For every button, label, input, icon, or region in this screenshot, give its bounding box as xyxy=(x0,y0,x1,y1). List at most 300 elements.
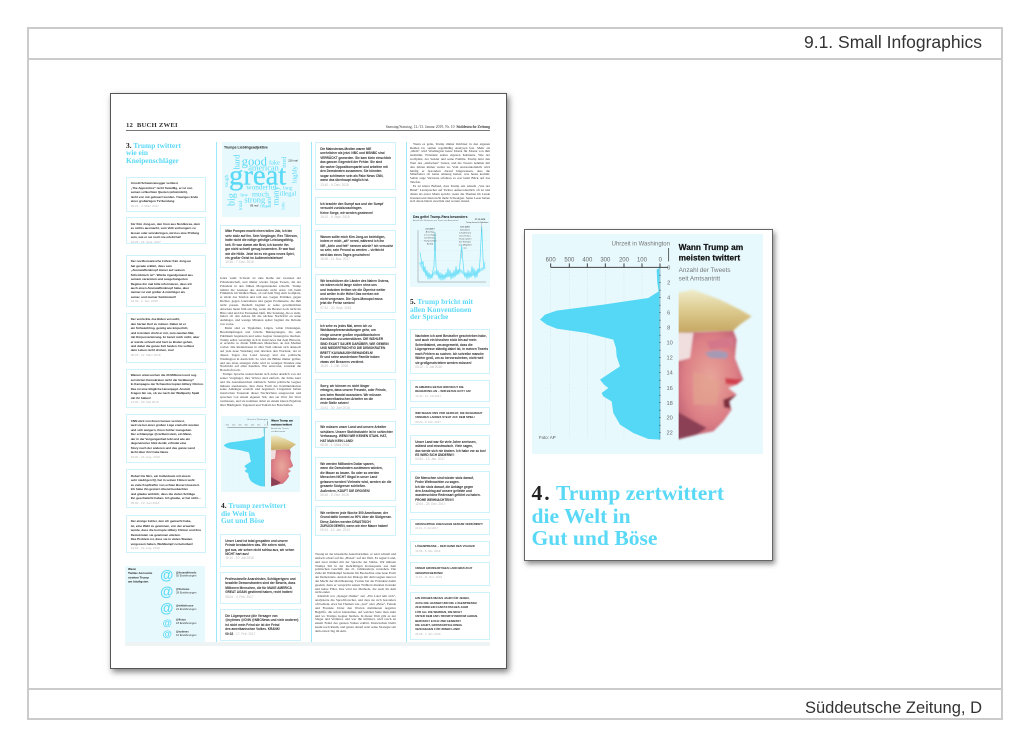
y axis: 2 xyxy=(667,281,670,287)
tweet box: Ich bin stolz darauf, die Anklage gegen xyxy=(415,484,473,488)
tweet box: Robert De Niro, ein Individuum mit einem xyxy=(131,474,190,478)
tweet box xyxy=(410,519,490,535)
tweet box: Wir müssen unser Land und unsere Arbeiter xyxy=(320,425,386,429)
chart annotations: Trump spricht xyxy=(459,237,472,240)
tweet box: uns beim Handel ausnutzen. Wir müssen xyxy=(320,392,381,396)
tweet box: schützen. Unsere Stahlindustrie ist in schlechter xyxy=(320,430,393,434)
account list xyxy=(176,570,197,637)
tweet box xyxy=(410,471,490,513)
tweet box: Ich sehe es jedes Mal, wenn ich zu xyxy=(320,324,372,328)
tweet box xyxy=(410,329,490,374)
tweet box: mit Körperverletzung. Er kennt mich nicht, aber xyxy=(131,335,199,339)
tweet box: Arnold Schwarzenegger verlässt xyxy=(131,181,178,185)
tweet box: 03:12 - 3. Juli 2018 xyxy=(415,365,442,369)
tweet box: 09:24 - 10. Jan. 2019 xyxy=(320,528,350,532)
tweet box: Story nach der anderen und das ganze Land xyxy=(131,446,195,450)
chart title xyxy=(413,214,468,222)
tweet box: Der nordkoreanische Führer Kim Jong-un xyxy=(131,259,191,263)
tweet box: wunderschöne Redensart geführt zu haben. xyxy=(415,493,481,497)
chart annotations: in Las Vegas xyxy=(424,234,436,236)
tweet box: Außerdem, KÄUFT DIE DROGEN! xyxy=(320,489,370,493)
tweet box: Demokraten sie gewinnen würden. xyxy=(131,533,181,537)
tweet box: Er und seine wunderbare Familie haben xyxy=(320,355,380,359)
tweet box: seiner, und meiner funktioniert! xyxy=(131,295,176,299)
tweet box: 18:48 - 11. Nov. 2017 xyxy=(320,257,350,261)
heading: section 4: 4. Trump zertwittert xyxy=(221,501,286,510)
tweet box: EIN FROHES NEUES JAHR FÜR JEDEN, xyxy=(415,596,469,600)
chart title: Wann Trump am xyxy=(679,242,743,252)
tweet box xyxy=(315,197,396,225)
tweet box: UNSER GROSSARTIGES LAND BRAUCHT xyxy=(415,566,472,570)
tweet box xyxy=(410,380,490,402)
tweet box: und auch ein bisschen stolz bin auf mein xyxy=(415,338,476,342)
tweet box: Warum sollte mich Kim Jong-un beleidigen, xyxy=(320,235,385,239)
tweet box xyxy=(126,515,206,553)
chart annotations: mit 12 Toten, xyxy=(459,234,471,237)
tweet box: 19:12 - 9. Sept. 2018 xyxy=(320,215,350,219)
heading: section 4 xyxy=(221,501,286,525)
tweet box: Die Mainstream-Medien waren NIE xyxy=(320,147,371,151)
chart annotations: Beileid xyxy=(427,243,434,245)
chart annotations: aus xyxy=(463,247,467,249)
line xyxy=(420,226,485,280)
tweet box: vergessen haben, Wahlkampf zu betreiben! xyxy=(131,542,193,546)
tweet box: 00:32 - 17. Feb. 2017 xyxy=(225,632,255,636)
article text xyxy=(220,277,301,407)
tweet box: zu viele Kopftreffer von echten Boxern kassiert. xyxy=(131,483,200,487)
tweet box: GRENZSICHERUNG! xyxy=(415,571,443,575)
word cloud words: many xyxy=(270,185,280,205)
chart annotations: 27.12.2018 xyxy=(475,218,486,220)
word cloud words: good xyxy=(241,154,267,168)
article text: Kürzlich trat „Spiegel Online“ auf, „Ein Land teilt sich“, analysierte die Sprachforscher, und dass sie sich besonders oft bedient, etwa bei Themen wie „Gut“ oder „Böse“, Feinde und Freunde. Unter den Worten dominieren negative Begriffe, die sofort klarstellen, auf welcher Seite man steht und wo Trumps Gegner bleiben. In dieser Welt gibt es nur Sieger und Verlierer, und wer ihn kritisiert, wird rasch zu einem Feind des ganzen Volkes erklärt. Dazwischen bleibt kaum noch Raum, und genau darauf setzt seine Strategie seit dem ersten Tag im Amt. xyxy=(315,594,396,633)
chart title: Anzahl der Retweets pro Tweet seit Amtsantritt xyxy=(413,219,459,222)
article text: Meist sind es Tippfehler, Lügen, wilde Drohungen, Beschimpfungen und falsche Behauptungen, die sein Publikum begeistern und seine Gegner fassungslos machen. Trump selbst verteidigt sich in Interviews mit dem Hinweis, er erreiche so direkt Millionen Menschen, an den Medien vorbei. Die Redaktionen in aller Welt stürzen sich dennoch auf jede neue Wendung und drucken den Wortlaut, der in diesen Tagen das Land bewegt und das politische Washington in Atem hält. So wird die Bühne immer größer, und aus einer einzigen Zeile wird in wenigen Stunden eine Nachricht auf allen Kanälen. Wer antwortet, verstärkt die Botschaft noch. xyxy=(220,326,301,372)
tweet box: den amerikanischen Arbeiter an die xyxy=(320,397,373,401)
newspaper header xyxy=(126,120,490,130)
chart annotations: 2.10.2017 xyxy=(425,228,435,230)
chart: tweets small copy: 100 xyxy=(257,425,261,427)
tweet box: und trotzdem droht er mir, zum zweiten Mal, xyxy=(131,331,194,335)
y axis: 20 xyxy=(666,415,673,421)
caption: source: Süddeutsche Zeitung, D xyxy=(805,699,982,717)
account list: @whitehouse xyxy=(176,604,194,608)
chart annotations: sein Mitgefühl xyxy=(459,243,472,246)
tweet box: 05:00 - 13. Juni 2018 xyxy=(131,501,159,505)
chart annotations: Trump twittert xyxy=(424,239,437,242)
tweet box: Der einzige Fehler, den ich gemacht habe, xyxy=(131,519,191,523)
tweet box: REGIERUNG AN – WIR BETEN GOTT AN! xyxy=(415,389,471,393)
article text xyxy=(410,143,490,202)
tweet box: Menschen NICHT illegal in unser Land xyxy=(320,475,377,479)
tweet box: versucht zurückzuschlagen. xyxy=(320,206,362,210)
tweet box: Die Menschen sind wieder stolz darauf, xyxy=(415,476,474,480)
tweet box: 06:08 - 1. Jan. 2019 xyxy=(415,632,440,636)
tweet box: sie wären nicht lange sicher ohne uns xyxy=(320,283,377,287)
tweet box: 14:02 - 22. Aug. 2018 xyxy=(131,546,160,550)
tweet box: Die Lügenpresse (die Versager von xyxy=(225,614,278,618)
word cloud words: hard xyxy=(232,153,241,169)
tweet box: 2019 WIRD EIN FANTASTISCHES JAHR xyxy=(415,605,468,609)
tweet box xyxy=(315,230,396,268)
newspaper header: Samstag/Sonntag, 12./13. Januar 2019, Nr. 10 Süddeutsche Zeitung xyxy=(386,124,490,128)
x axis: 200 xyxy=(619,257,630,263)
chart: tweets small copy: meisten twittert xyxy=(271,422,292,426)
tweet box: Ich habe ihn gestern Abend beobachtet xyxy=(131,487,188,491)
y axis xyxy=(660,265,673,440)
tweet box: UNSERES LANDES STEHT AUF DEM SPIEL! xyxy=(415,415,475,419)
tweet box: @nytimes @CNN @NBCNews und viele anderen) xyxy=(225,618,298,622)
tweet box xyxy=(126,313,206,363)
heading: section 4 large: die Welt in xyxy=(532,504,631,528)
icon: at signs: @ xyxy=(160,568,173,582)
chart: Wann Trump am meisten twittert xyxy=(532,234,763,454)
heading: section 5: der Sprache xyxy=(410,312,448,321)
tweet box: 07:32 - 20. Sept. 2018 xyxy=(320,306,351,310)
tweet box: zerstörten Demokraten nicht die Veräbung? xyxy=(131,378,194,382)
tweet box: und sich weigern, ihren Fehler zuzugeben. xyxy=(131,428,192,432)
chart: tweets small copy: Uhrzeit in Washington xyxy=(247,418,269,421)
word cloud words: 85 mal xyxy=(250,203,258,207)
tweet box: BERUHIGT EUCH UND GENIESST xyxy=(415,619,461,623)
tweet box: sogar schlimmer sein als Fake News CNN, xyxy=(320,174,383,178)
tweet box: lassen oder umzubringen, wird es eine Prüfung xyxy=(131,231,199,235)
word cloud words: strong xyxy=(244,195,265,204)
word cloud words: 216 mal xyxy=(288,158,298,162)
tweet box: wird das eines Tages geschehen! xyxy=(320,253,370,257)
tweet box: gar nicht schnell genug loswerden. Er war faul xyxy=(225,247,295,251)
tweet box: 00:20 - 9. Feb. 2017 xyxy=(415,420,441,424)
tweet box xyxy=(220,225,301,268)
tweet box: Regime ihn mal bitte informieren, dass ich xyxy=(131,282,192,286)
tweet box: Verfassung. WENN WIR KEINEN STAHL HAT, xyxy=(320,434,387,438)
silhouette area xyxy=(540,268,660,440)
word cloud words: low xyxy=(240,193,248,198)
word cloud words: fake xyxy=(269,159,280,166)
tweet box: Fragen bin sie, ob sie nach der Wahlparty Spaß xyxy=(131,391,199,395)
tweet box: 13:41 - 30. Juni 2018 xyxy=(320,406,350,410)
tweet box: Der verrückte Joe Biden versucht, xyxy=(131,317,180,321)
tweet box: das ganzen Gegenteil der Fehler. Sie sind xyxy=(320,160,382,164)
panel: enlarged detail page xyxy=(524,229,773,561)
y axis: 22 xyxy=(666,430,673,436)
tweet box: den Demokraten zusammen. Sie könnten xyxy=(320,169,381,173)
tweet box xyxy=(126,255,206,307)
icon: at signs xyxy=(160,568,173,640)
tweet box: Professionelle Anarchisten, Schlägertypen und xyxy=(225,577,296,581)
chart title: Das gefiel Trump-Fans besonders xyxy=(413,214,468,218)
tweet box: Nachdem ich zwei Bestseller geschrieben habe, xyxy=(415,334,487,338)
tweet box: wenn die Demokraten zustimmen würden, xyxy=(320,466,383,470)
tweet box: gut aus, wir sehen nicht schlau aus, wir sehen xyxy=(225,548,294,552)
tweet box xyxy=(315,421,396,448)
word cloud words: hard xyxy=(267,197,273,207)
heading: section 3: wie ein xyxy=(126,148,148,157)
tweet box: indem er mich „alt“ nennt, während ich ihn xyxy=(320,239,384,243)
tweet box: ist, eine Wahl zu gewinnen, von der erwartet xyxy=(131,524,195,528)
tweet box: Frohe Weihnachten zu sagen. xyxy=(415,480,459,484)
tweet box: Schreibtalent, um angemerkt, dass die xyxy=(415,343,473,347)
heading: section 4 large: Trump zertwittert xyxy=(556,481,724,505)
account list: 18 Erwähnungen xyxy=(176,621,197,625)
tweet box: und trotzdem treiben sie die Ölpreise weiter xyxy=(320,288,385,292)
panel: twitter accounts xyxy=(125,566,205,642)
tweet box xyxy=(410,562,490,586)
y axis: 8 xyxy=(667,326,670,332)
tweet box: UNTER DEM ANTI-TRUMP-SYNDROM LEIDEN. xyxy=(415,614,478,618)
tweet box: Der schlampige @carlbernstein, ein Mann, xyxy=(131,432,192,436)
panel title: streiten Trump xyxy=(128,575,149,579)
tweet box: gesamte Südgrenze schließen. xyxy=(320,484,366,488)
panel: word cloud xyxy=(222,142,300,217)
tweet box: des amerikanischen Volkes. KRANK! xyxy=(225,627,280,631)
tweet box: BRETT KAVANAUGH BEHANDELN! xyxy=(320,351,373,355)
tweet box: einige unserer großen republikanischen xyxy=(320,333,380,337)
word cloud words: wonderful xyxy=(246,182,276,191)
y axis: 10 xyxy=(666,341,673,347)
tweet box: SIND EXAKT SAUER DARÜBER, WIE GEMEIN xyxy=(320,342,389,346)
tweet box xyxy=(126,177,206,212)
tweet box: Wir beschützen die Länder des Nahen Ostens, xyxy=(320,279,389,283)
tweet box: mit ihr hatten! xyxy=(131,396,151,400)
tweet box: einer großartigen TV-Sendung xyxy=(131,199,174,203)
tweet box: ein großer Geist im Außenministerium! xyxy=(225,256,283,260)
account list: 55 Erwähnungen xyxy=(176,574,197,578)
tweet box: Das ist eine klägliche Hexenjagd. Anstatt xyxy=(131,387,190,391)
tweet box: 04:00 - 24. Aug. 2018 xyxy=(131,455,160,459)
tweet box: den Anschlag auf unsere geliebte und xyxy=(415,489,472,493)
tweet box: FROHE WEIHNACHTEN!!! xyxy=(415,498,454,502)
icon: at signs: @ xyxy=(163,629,172,640)
tweet box: Wir werden Milliarden Dollar sparen, xyxy=(320,462,374,466)
tweet box: IN AMERIKA BETEN WIR NICHT DIE xyxy=(415,385,464,389)
word cloud words: total xyxy=(238,200,244,210)
tweet box: unehrlicher als jetzt. NBC und MSNBC sind xyxy=(320,151,385,155)
tweet box: 04:54 - 13. Jan. 2017 xyxy=(415,457,445,461)
tweet box: und glaube wirklich, dass die vielen Schläge xyxy=(131,492,195,496)
tweet box: Lügenpresse ständig dabei ist, in meinen Tweets xyxy=(415,347,488,351)
tweet box: wurde, dass die korrupte Hillary Clinton und ihre xyxy=(131,528,201,532)
word cloud words: true xyxy=(260,204,267,209)
chart subtitle: seit Amtsantritt xyxy=(679,276,720,283)
tweet box: hatte nicht die nötige geistige Leistungsfähig- xyxy=(225,238,294,242)
tweet box: Für Kim Jong-un, den Irren aus Nordkorea, dem xyxy=(131,222,200,226)
tweet box: die Mauer zu bauen. So oder so werden xyxy=(320,471,379,475)
account list: 24 Erwähnungen xyxy=(176,607,197,611)
chart annotations: Trump besucht Soldaten xyxy=(466,220,489,223)
tweet box: NICHT hart aus! xyxy=(225,552,249,556)
heading: section 4: die Welt in xyxy=(221,509,255,518)
grid lines xyxy=(551,267,642,438)
tweet box: auch einen Atomwaffenknopf habe, aber xyxy=(131,286,189,290)
account list: @foxnews xyxy=(176,587,190,591)
chart annotations: 8.11.2018 xyxy=(460,226,470,228)
tweet box: den harten Kerl zu mimen. Dabei ist er xyxy=(131,322,186,326)
tweet box xyxy=(126,469,206,508)
x axis xyxy=(546,242,670,267)
tweet box: sie großgeschrieben werden müssen! xyxy=(415,361,472,365)
tweet box: der in der Vergangenheit lebt und wie ein xyxy=(131,437,190,441)
tweet box: GREAT AGAIN gestimmt haben, recht hatten! xyxy=(225,590,293,594)
bottom band xyxy=(125,642,490,646)
article text: Wenn es gelte, Trump immer Kürbiser in den eigenen Reihen ist, stellen regelmäßig Analysen fest. Mehr als „Mein“ wird Washington heute Monat für Monat von ihm bestimmt, Präsident seines eigenen Kabinetts. Wie der Golfplatz, der Sender und seine Familie. Trump lernt den Wert des „einfachen“ Satzes, und die Tweets nehmen mit den Jahren immer weiter zu. Vom Autorenkollektiv wird häufig er besonders darauf hingewiesen, dass die Mitarbeiter oft keine Ahnung hatten, was heute kommt. Selbst enge Vertraute erfahren es erst beim Blick auf das Telefon. xyxy=(410,143,490,184)
tweet box: ES WIRD SICH ÄNDERN!!! xyxy=(415,453,454,457)
tweet box: ihn geschwächt haben. Ich glaube, er hat nicht... xyxy=(131,496,201,500)
tweet box: Wahlkampfveranstaltungen gehe, um xyxy=(320,328,376,332)
tweet box: WIR SEHEN UNS VOR GERICHT, DIE SICHERHEIT xyxy=(415,411,483,415)
tweet box: Sorry, wir können es nicht länger xyxy=(320,384,370,388)
word cloud words: great xyxy=(229,159,286,191)
tweet box: keit. Er war dumm wie Brot, ich konnte ihn xyxy=(225,243,289,247)
tweet box: ein Schwächling, geistig wie körperlich, xyxy=(131,326,188,330)
tweet box xyxy=(126,217,206,244)
chart: tweets small copy: 300 xyxy=(244,425,249,427)
word cloud words xyxy=(224,153,298,210)
tweet box: Schreibtisch ist“. Würde irgendjemand aus xyxy=(131,273,193,277)
tweet box: 12:04 - 25. Dez. 2017 xyxy=(415,502,445,506)
chart annotations: mit 58 Toten, xyxy=(424,236,436,239)
tweet box: „The Apprentice“ nicht freiwillig, er ist von xyxy=(131,186,192,190)
tweet box: das werde sich nie ändern. Ich habe vor zu tun! xyxy=(415,448,486,452)
tweet box: erste Stelle setzen! xyxy=(320,401,349,405)
tweet box: seinem verarmten und ausgehungerten xyxy=(131,277,188,281)
heading: section title: 9.1. Small Infographics xyxy=(804,32,982,52)
y axis: 18 xyxy=(666,401,673,407)
heading: section 4: Gut und Böse xyxy=(221,516,264,525)
tweet box: Wörter groß, um zu hervorzuheben, nicht weil xyxy=(415,356,483,360)
chart: tweets small copy: 500 xyxy=(232,425,236,427)
chart title xyxy=(679,242,743,263)
icon: at signs: @ xyxy=(160,600,173,616)
tweet box: sehr niedrigen IQ, hat in seinen Filmen wohl xyxy=(131,478,195,482)
y axis: 6 xyxy=(667,311,670,317)
word cloud words: much xyxy=(252,189,269,198)
word cloud words: long xyxy=(283,185,292,191)
chart: tweets small copy: 200 xyxy=(251,425,255,427)
word cloud words: american xyxy=(248,163,279,172)
chart subtitle xyxy=(679,267,731,283)
tweet box: HAT MAN KEIN LAND! xyxy=(320,439,353,443)
tweet box xyxy=(126,369,206,408)
article text: Jedes weiß: Schwab ist eine Reihe der Grenzen der Präsidentschaft, und immer wieder folgen Tweets, die der Präsident in den frühen Morgenstunden schreibt. Trump nimmt die Grenzen des Anstands nicht ernst. Ob beim Frühstück im Weißen Haus, ob auf dem Weg zum Golfplatz, er zückt das Telefon und teilt aus. Gegen Politiker, gegen Richter, gegen Journalisten und gegen Prominente, die ihm nicht passen. Deshalb beginnt er seine gewöhnlichen Attacken meist früh am Tag, wenn die Berater noch nicht im Büro sind und das Fernsehen läuft. Die Sendung, die er sieht, liefert oft den Anlass für die nächste Nachricht an seine Anhänger, und wenige Minuten später beginnt die Debatte von vorne. xyxy=(220,277,301,326)
word cloud words: highly xyxy=(291,165,298,183)
heading: section 5: allen Konventionen xyxy=(410,305,471,314)
tweet box: jetzt die Preise senken! xyxy=(320,301,355,305)
heading: section 4 large xyxy=(532,481,724,550)
tweet box xyxy=(220,572,301,604)
tweet box: hat gerade erklärt, dass sein xyxy=(131,264,172,268)
tweet box: degenerierter Idiot denkt, erfindet eine xyxy=(131,441,186,445)
heading: section 4 large: 4. xyxy=(532,481,552,505)
account list: @flotus xyxy=(176,618,186,622)
tweet box: sehr stolz auf ihn. Sein Vorgänger, Rex Tillerson, xyxy=(225,234,298,238)
tweet box: Das Problem ist, dass sie in vielen Staaten xyxy=(131,537,192,541)
y axis: 14 xyxy=(666,371,673,377)
tweet box xyxy=(315,457,396,501)
tweet box: FÜR ALL DIE WERDEN, DIE NICHT xyxy=(415,610,462,614)
tweet box xyxy=(410,541,490,556)
tweet box: wie die Hölle. Jetzt ist es ein ganz neues Spiel, xyxy=(225,252,295,256)
tweet box: 08:28 - 22. März 2018 xyxy=(131,353,160,357)
account list: 16 Erwähnungen xyxy=(176,633,197,637)
tweet box xyxy=(315,506,396,536)
tweet box: „Atomwaffenknopf immer auf seinem xyxy=(131,268,185,272)
chart annotations: Anschlag xyxy=(426,230,435,233)
heading: section 3: Kneipenschläger xyxy=(126,156,179,165)
icon: at signs: @ xyxy=(160,584,173,599)
tweet box xyxy=(315,319,396,373)
tweet box xyxy=(315,379,396,410)
tweet box: Kandidaten zu unterstützen. DIE WÄHLER xyxy=(320,337,383,341)
tweet box: wütend und misstrauisch. Viele sagen, xyxy=(415,444,473,448)
tweet box: und dabei die ganze Zeit heulen. Du solltest xyxy=(131,344,194,348)
tweet box: gelassen werden! Vielmehr wird, werden sie die xyxy=(320,480,391,484)
account list: 28 Erwähnungen xyxy=(176,590,197,594)
tweet box: 13:06 - 6. Okt. 2018 xyxy=(415,549,440,553)
tweet box: 09:24 - 4. März 2017 xyxy=(131,204,159,208)
tweet box: Feinde beobachten das. Wir sehen nicht, xyxy=(225,543,286,547)
chart annotations xyxy=(424,218,489,249)
tweet box: ist nicht mein Feind sie ist der Feind xyxy=(225,623,279,627)
tweet box: lacht über ihn! Fake News xyxy=(131,450,168,454)
tweet box: 13:30 - 14. Juli 2017 xyxy=(415,394,441,398)
tweet box xyxy=(410,407,490,425)
y axis: 12 xyxy=(666,355,673,361)
x axis: Uhrzeit in Washington xyxy=(612,242,670,248)
article text xyxy=(315,553,396,633)
tweet box: Ich brachte den Sumpf aus und der Sumpf xyxy=(320,202,383,206)
tweet box: sein, wie er sie noch nie erlebt hat! xyxy=(131,235,181,239)
tweet box xyxy=(315,142,396,190)
chart: tweets small copy: seit Amtsantritt xyxy=(271,430,286,433)
photo credit: Foto: AP xyxy=(539,435,556,440)
panel title: Twitter-Accounts xyxy=(128,571,153,575)
panel title: Wenn xyxy=(128,567,136,571)
tweet box: Millionen Menschen, die für MAKE AMERICA xyxy=(225,586,292,590)
tweet box: die wahre Oppositionspartei und arbeiten mit xyxy=(320,165,388,169)
tweet box: LÜGENPRESSE – DER FEIND DES VOLKES! xyxy=(415,544,475,548)
tweet box: er würde schnell und hart zu Boden gehen, xyxy=(131,340,193,344)
tweet box: 13:04 - 30. Mai 2018 xyxy=(131,400,159,404)
tweet box: 04:28 - 22. Sept. 2017 xyxy=(131,240,161,244)
tweet box: weil sie bei einer großen Lüge erwischt worden xyxy=(131,423,199,427)
chart: tweets small copy: 0 xyxy=(264,425,266,427)
chart: tweets small copy xyxy=(221,416,300,492)
article text: Twung ist der klassische Autoritarismus, er setzt schnell und einfach scharf auf die „Bösen“ auf der Welt. Es regiert Land, und zwar immer mit der Sprache der Stärke. Wir müssen Trumps Stil in der mehrfältigen Konsequenz aus dem politischen Geschäft des 21. Jahrhunderts verstehen. Die Zeile im Wahlkampf bedeutet für Beobachter eine neue Form der Demokratie. Anstatt des Dialogs mit dem Gegner nutzt er die Macht der Mobilisierung. Twitter hat der Präsident damit geadelt, denn er verspricht seinen Wählern direkten Kontakt und keine Filter. Das wird zur Methode, die auch im Amt nicht endet. xyxy=(315,553,396,594)
tweet box: dein Leben nicht drohen, Joe! xyxy=(131,348,174,352)
article text: Trumps Sprache unterscheidet sich dabei deutlich von der seiner Vorgänger, ihre Wörter sind einfach, die Sätze kurz und die Ausrufezeichen zahlreich. Selbst politische Gegner müssen anerkennen, dass diese Form der Kommunikation seine Anhänger erreicht und begeistert. Linguisten haben inzwischen Tausende dieser Nachrichten ausgewertet und sprechen von einem eigenen Stil, den sie Wort für Wort vermessen, und sie kommen dabei zu einem klaren Ergebnis über Häufigkeit, Tageszeit und Tonfall der Botschaften. xyxy=(220,372,301,407)
tweet box: Grund dafür kommt zu 90% über die Südgrenze. xyxy=(320,515,392,519)
tweet box: In Kampagne der Schwerkorrupten Hillary Clinton. xyxy=(131,382,204,386)
tweet box: es nichts ausmacht, sein Volk verhungern zu xyxy=(131,226,196,230)
tweet box: 04:34 - 6. Juli 2017 xyxy=(415,527,438,530)
tweet box: etwas viel Besseres verdient. xyxy=(320,360,364,364)
tweet box: bezahlte Demonstranten sind der Beweis, dass xyxy=(225,581,295,585)
word cloud words: little xyxy=(280,201,285,209)
heading: section 3 xyxy=(126,140,181,165)
tweet box: 16:25 - 1. Okt. 2018 xyxy=(320,364,348,368)
y axis: 4 xyxy=(667,296,670,302)
tweet box xyxy=(126,414,206,463)
chart title: meisten twittert xyxy=(679,253,740,263)
tweet box: so sehr, sein Freund zu werden – vielleicht xyxy=(320,248,384,252)
tweet box xyxy=(220,534,301,567)
newspaper header: 12 BUCH ZWEI xyxy=(126,122,178,128)
tweet box xyxy=(220,609,301,641)
chart annotations: in Kalifornien xyxy=(459,231,472,234)
chart: tweets small copy: 600 xyxy=(226,425,230,427)
tweet box: UND NIEDERTRÄCHTIG DIE DEMOKRATEN xyxy=(320,346,385,350)
